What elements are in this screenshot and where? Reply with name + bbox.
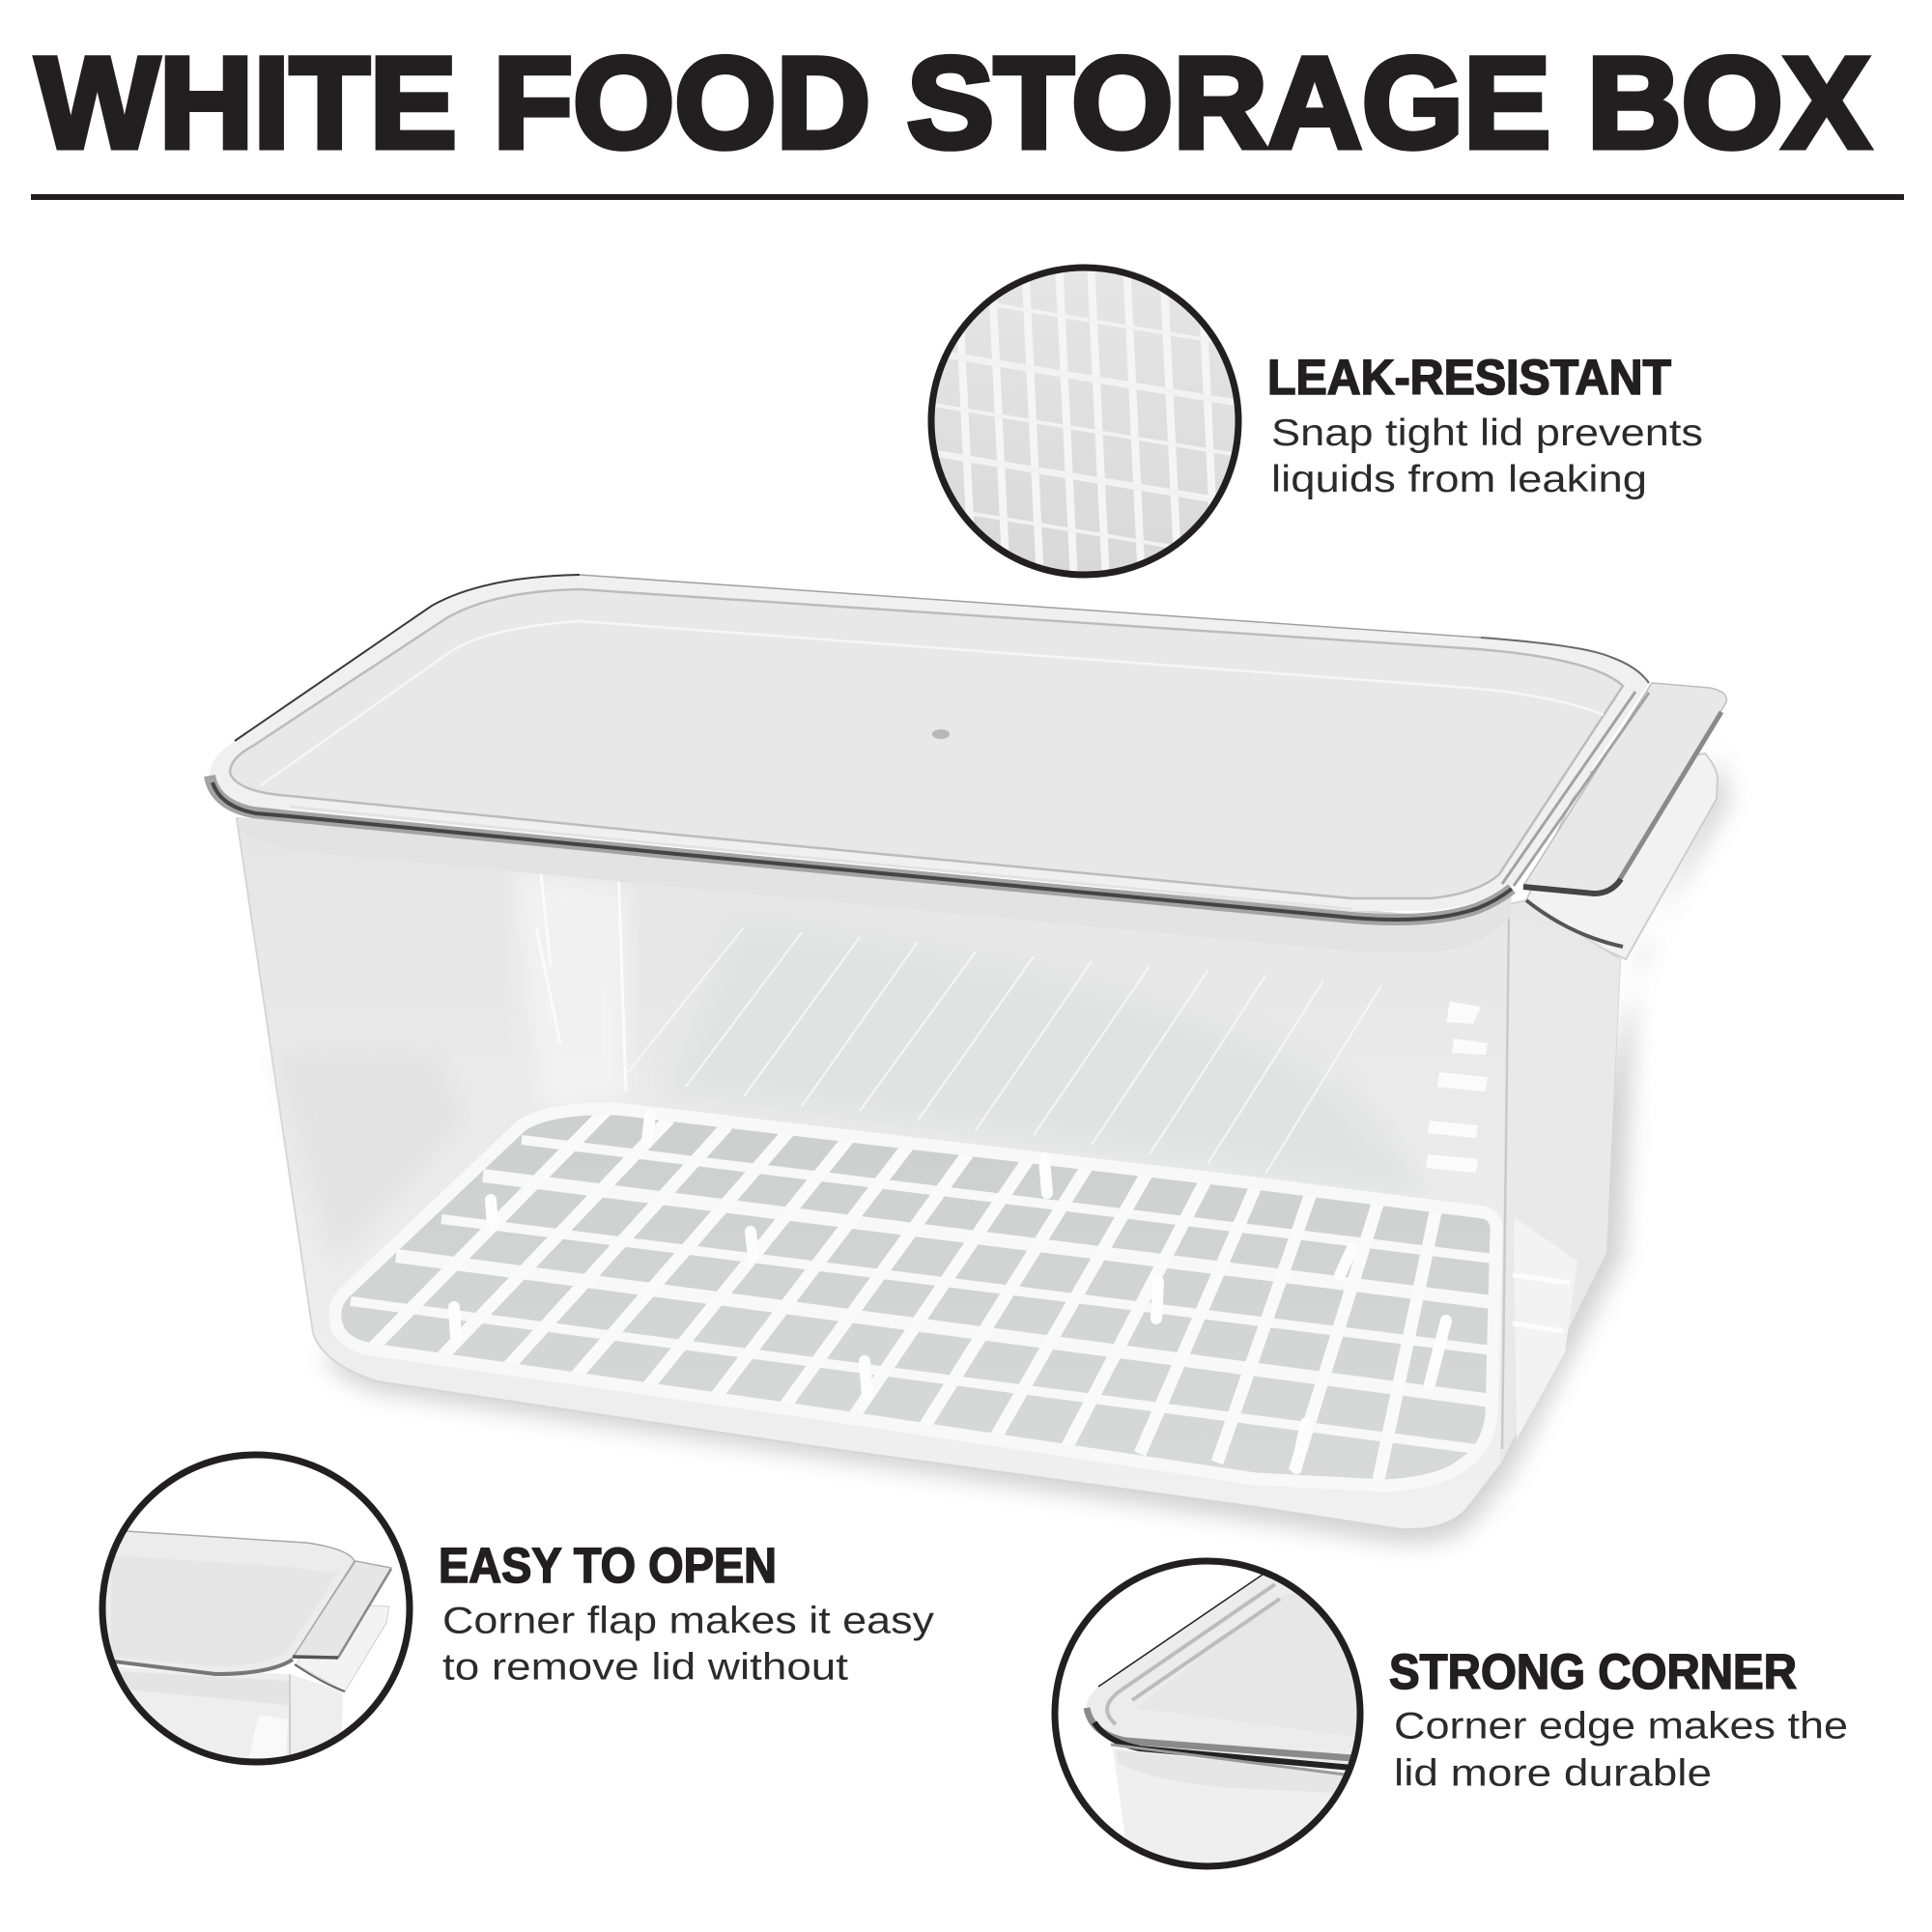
- left wall mat reflection: [275, 1053, 464, 1265]
- lid: [97, 1529, 355, 1674]
- callout: easy to open: to remove lid without: [442, 1646, 848, 1689]
- lower handle: [297, 1604, 389, 1691]
- callout: leak-resistant: liquids from leaking: [1271, 459, 1647, 500]
- product: transparent storage box: [210, 575, 1729, 1544]
- body text: Snap tight lid prevents: [1271, 412, 1703, 454]
- left wall lighter column: [512, 869, 628, 1111]
- lid front rim: [210, 776, 1512, 920]
- heading: EASY TO OPEN: [439, 1538, 777, 1593]
- lid top-left dark edge: [235, 575, 580, 741]
- heading: LEAK-RESISTANT: [1267, 350, 1671, 405]
- detail circle: corner flap: [97, 1455, 410, 1768]
- mat frame: [335, 1109, 1496, 1486]
- flap outer edge: [1620, 712, 1721, 879]
- lid inner panel: [111, 1555, 340, 1666]
- wall: [118, 1667, 343, 1758]
- mat long rails: [351, 1140, 1493, 1451]
- body text: Corner edge makes the: [1394, 1706, 1848, 1747]
- box body: [237, 818, 1620, 1529]
- white drain mat: [335, 1109, 1496, 1486]
- lid top: [210, 575, 1649, 911]
- right side panel: [1500, 915, 1620, 1465]
- title: WHITE FOOD STORAGE BOX: [36, 31, 1870, 176]
- box drop shadow: [324, 753, 1729, 1544]
- callout: easy to open: [97, 1455, 935, 1768]
- left wall highlight streaks: [536, 869, 626, 1092]
- body text: Corner flap makes it easy: [442, 1600, 935, 1642]
- callout: strong corner: lid more durable: [1394, 1752, 1712, 1795]
- mat pegs: [454, 1116, 1446, 1468]
- detail circle: mesh: [927, 261, 1256, 589]
- detail circle: corner edge: [1055, 1561, 1372, 1874]
- heading: STRONG CORNER: [1389, 1644, 1797, 1699]
- lid top-right dark edge: [1481, 638, 1649, 683]
- mat cross rails: [374, 1111, 1436, 1480]
- wall band: [1117, 1750, 1343, 1793]
- lid center dimple: [932, 729, 950, 739]
- flap tab: [1523, 683, 1726, 892]
- lid right rim: [1502, 692, 1649, 886]
- lid inner panel: [230, 589, 1623, 898]
- callout: leak-resistant: [927, 261, 1703, 589]
- back wall reflection: [667, 918, 1430, 1198]
- wall: [1113, 1748, 1346, 1862]
- flap dark base: [1523, 879, 1621, 894]
- title underline: [31, 194, 1904, 200]
- lid inner highlight line: [261, 621, 1604, 785]
- rim band on wall: [239, 817, 1512, 952]
- lower handle: [1526, 753, 1718, 959]
- handle curve: [1526, 900, 1623, 947]
- dark rim: [1087, 1708, 1352, 1758]
- back wall grid reflection lines: [628, 927, 1381, 1174]
- callout: strong corner: [1055, 1561, 1848, 1874]
- lid: [1086, 1575, 1354, 1764]
- lid top outline: [580, 575, 1481, 638]
- back wall bright highlights: [1426, 1002, 1488, 1173]
- flap: [293, 1561, 391, 1658]
